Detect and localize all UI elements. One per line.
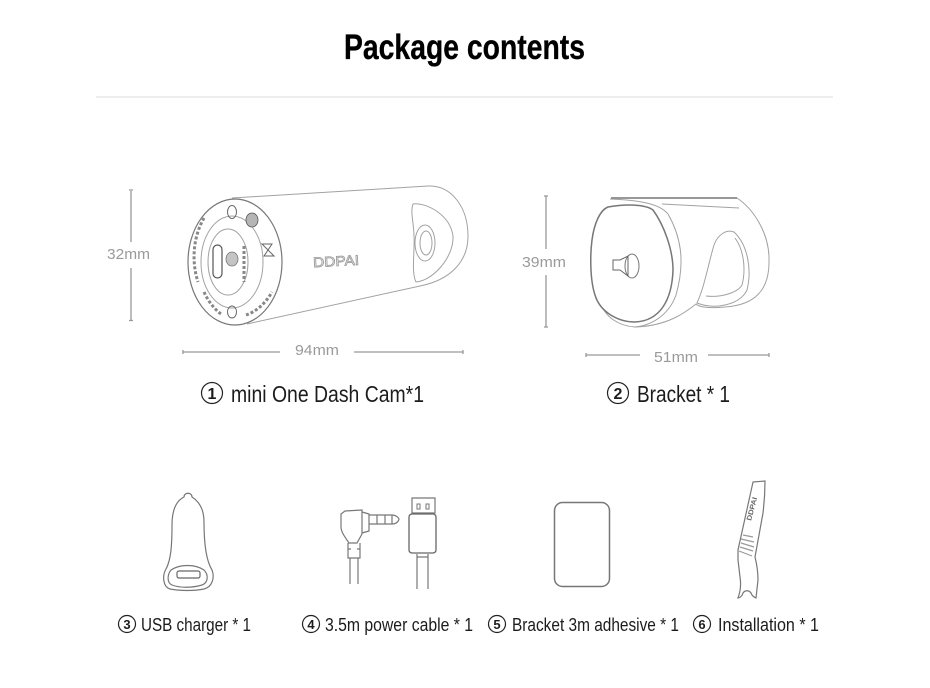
USB plug [409, 498, 436, 589]
label: Installation: Installation * 1 [718, 615, 819, 635]
dimension: 39mm [522, 196, 566, 327]
label: power cable: 3.5m power cable * 1 [325, 615, 473, 635]
label: Bracket: 2 [614, 386, 623, 403]
label: Bracket: Bracket * 1 [637, 381, 730, 407]
bracket ring opening [697, 231, 749, 306]
icon: USB charger [164, 493, 213, 590]
label: Installation: 6 [698, 617, 706, 632]
dimension: 94mm: 94mm [295, 342, 339, 359]
bracket top edge [611, 197, 737, 199]
bracket illustration [591, 198, 769, 327]
icon: power cable [341, 498, 436, 589]
dash cam illustration [188, 186, 468, 325]
dimension: 32mm: 32mm [107, 246, 150, 263]
label: adhesive: 5 [493, 617, 501, 632]
lens housing [412, 204, 453, 282]
icon: installation tool [738, 481, 765, 598]
dimension: 51mm: 51mm [654, 349, 698, 366]
icon: installation tool: DDPAI [746, 496, 759, 522]
dimension: 32mm [107, 190, 150, 320]
label: Bracket [608, 381, 730, 407]
label: mini One Dash Cam: 1 [208, 386, 217, 403]
bracket plate [591, 205, 673, 322]
label: mini One Dash Cam: mini One Dash Cam*1 [231, 381, 424, 407]
DDPAI logo: DDPAI [313, 252, 359, 270]
camera front face [188, 199, 282, 325]
bracket body [600, 198, 769, 327]
audio jack [341, 510, 399, 584]
bracket ball joint [613, 254, 639, 278]
label: USB charger: USB charger * 1 [141, 615, 251, 635]
dimension: 51mm [586, 349, 769, 366]
dimension: 94mm [183, 342, 463, 359]
label: USB charger: 3 [123, 617, 131, 632]
dimension: 39mm: 39mm [522, 254, 566, 271]
camera body [232, 186, 468, 324]
title: Package contents [344, 28, 585, 67]
label: power cable: 4 [307, 617, 315, 632]
label: adhesive: Bracket 3m adhesive * 1 [512, 615, 679, 635]
icon: adhesive pad [554, 502, 610, 586]
